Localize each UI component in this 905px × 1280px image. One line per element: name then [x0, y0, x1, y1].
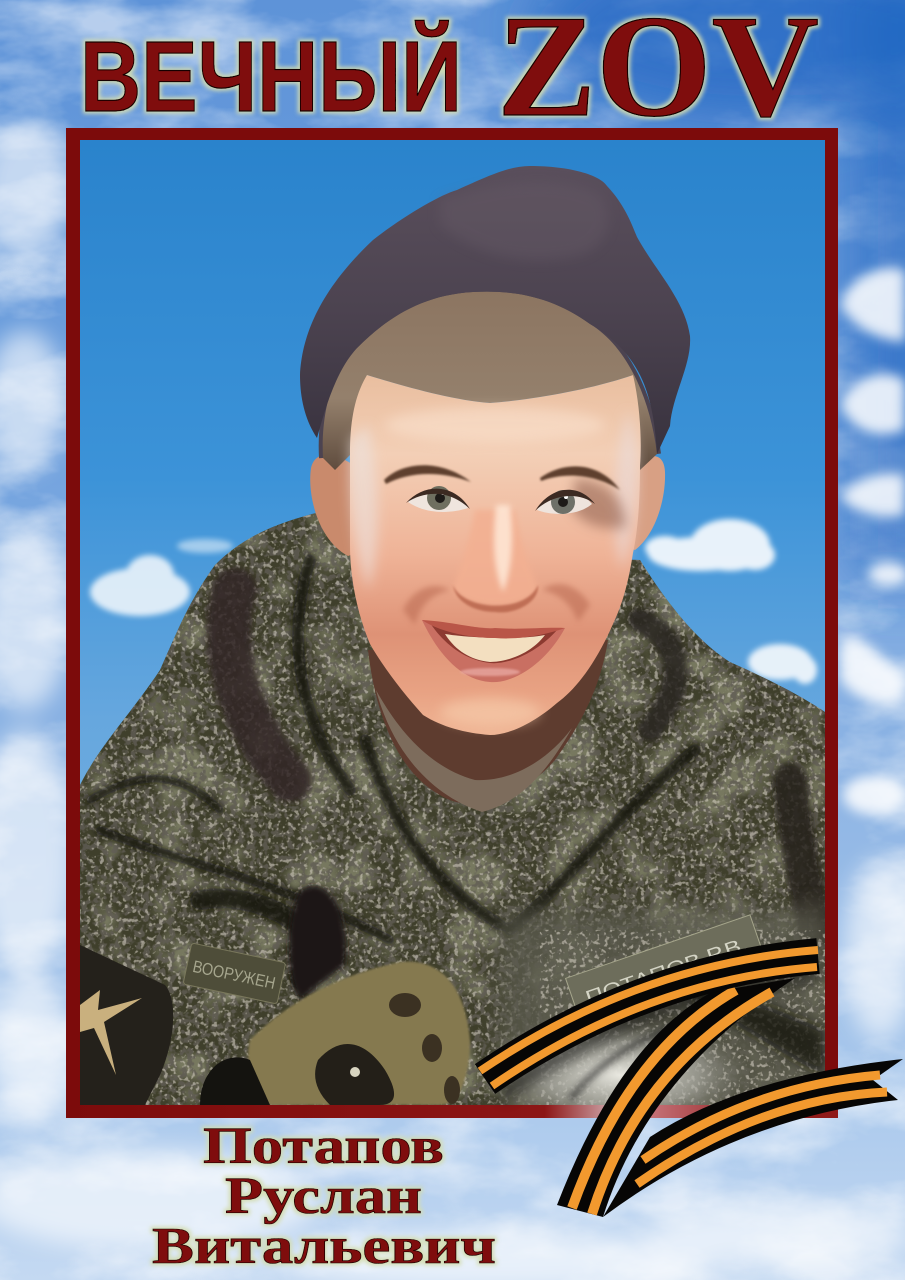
title: [80, 0, 819, 147]
undershirt collar: [376, 690, 572, 812]
name tape right: [565, 914, 761, 1006]
glove: [200, 885, 470, 1105]
bottom frame fade: [66, 1105, 838, 1118]
name: [152, 1118, 496, 1275]
faded sleeve lower right: [490, 910, 830, 1130]
frame: [66, 128, 838, 1118]
title word: Вечный: ВЕЧНЫЙ: [80, 20, 462, 133]
cap shading: [444, 192, 582, 250]
patronymic: Витальевич: [152, 1218, 496, 1275]
name tape left: [183, 943, 286, 1004]
jacket folds: [90, 560, 815, 980]
top ribbon stroke: [480, 950, 818, 1086]
shoulder patch: [80, 945, 173, 1105]
photo sky: [80, 140, 825, 785]
left ear: [310, 456, 350, 556]
hair: [323, 292, 657, 470]
eyebrows: [384, 465, 620, 490]
eyes: [406, 486, 595, 514]
jacket: [80, 500, 825, 1105]
name tape right: ПОТАПОВ Р.В.: [583, 934, 751, 1009]
lower ribbon stroke: [603, 1059, 903, 1217]
diagonal ribbon stroke: [557, 978, 795, 1217]
photo panel: [80, 140, 830, 1130]
first name: Руслан: [225, 1168, 422, 1225]
Z ribbon: [480, 950, 903, 1217]
face shading: [349, 407, 638, 726]
smile: [422, 620, 565, 682]
ribbon shadow: [500, 975, 815, 1095]
surname: Потапов: [203, 1118, 444, 1175]
face: [350, 375, 641, 735]
clouds in photo: [90, 519, 817, 684]
cap: [300, 166, 690, 454]
neck: [368, 640, 608, 804]
name tape left: ВООРУЖЕН: [191, 957, 277, 993]
right ear: [634, 456, 666, 550]
